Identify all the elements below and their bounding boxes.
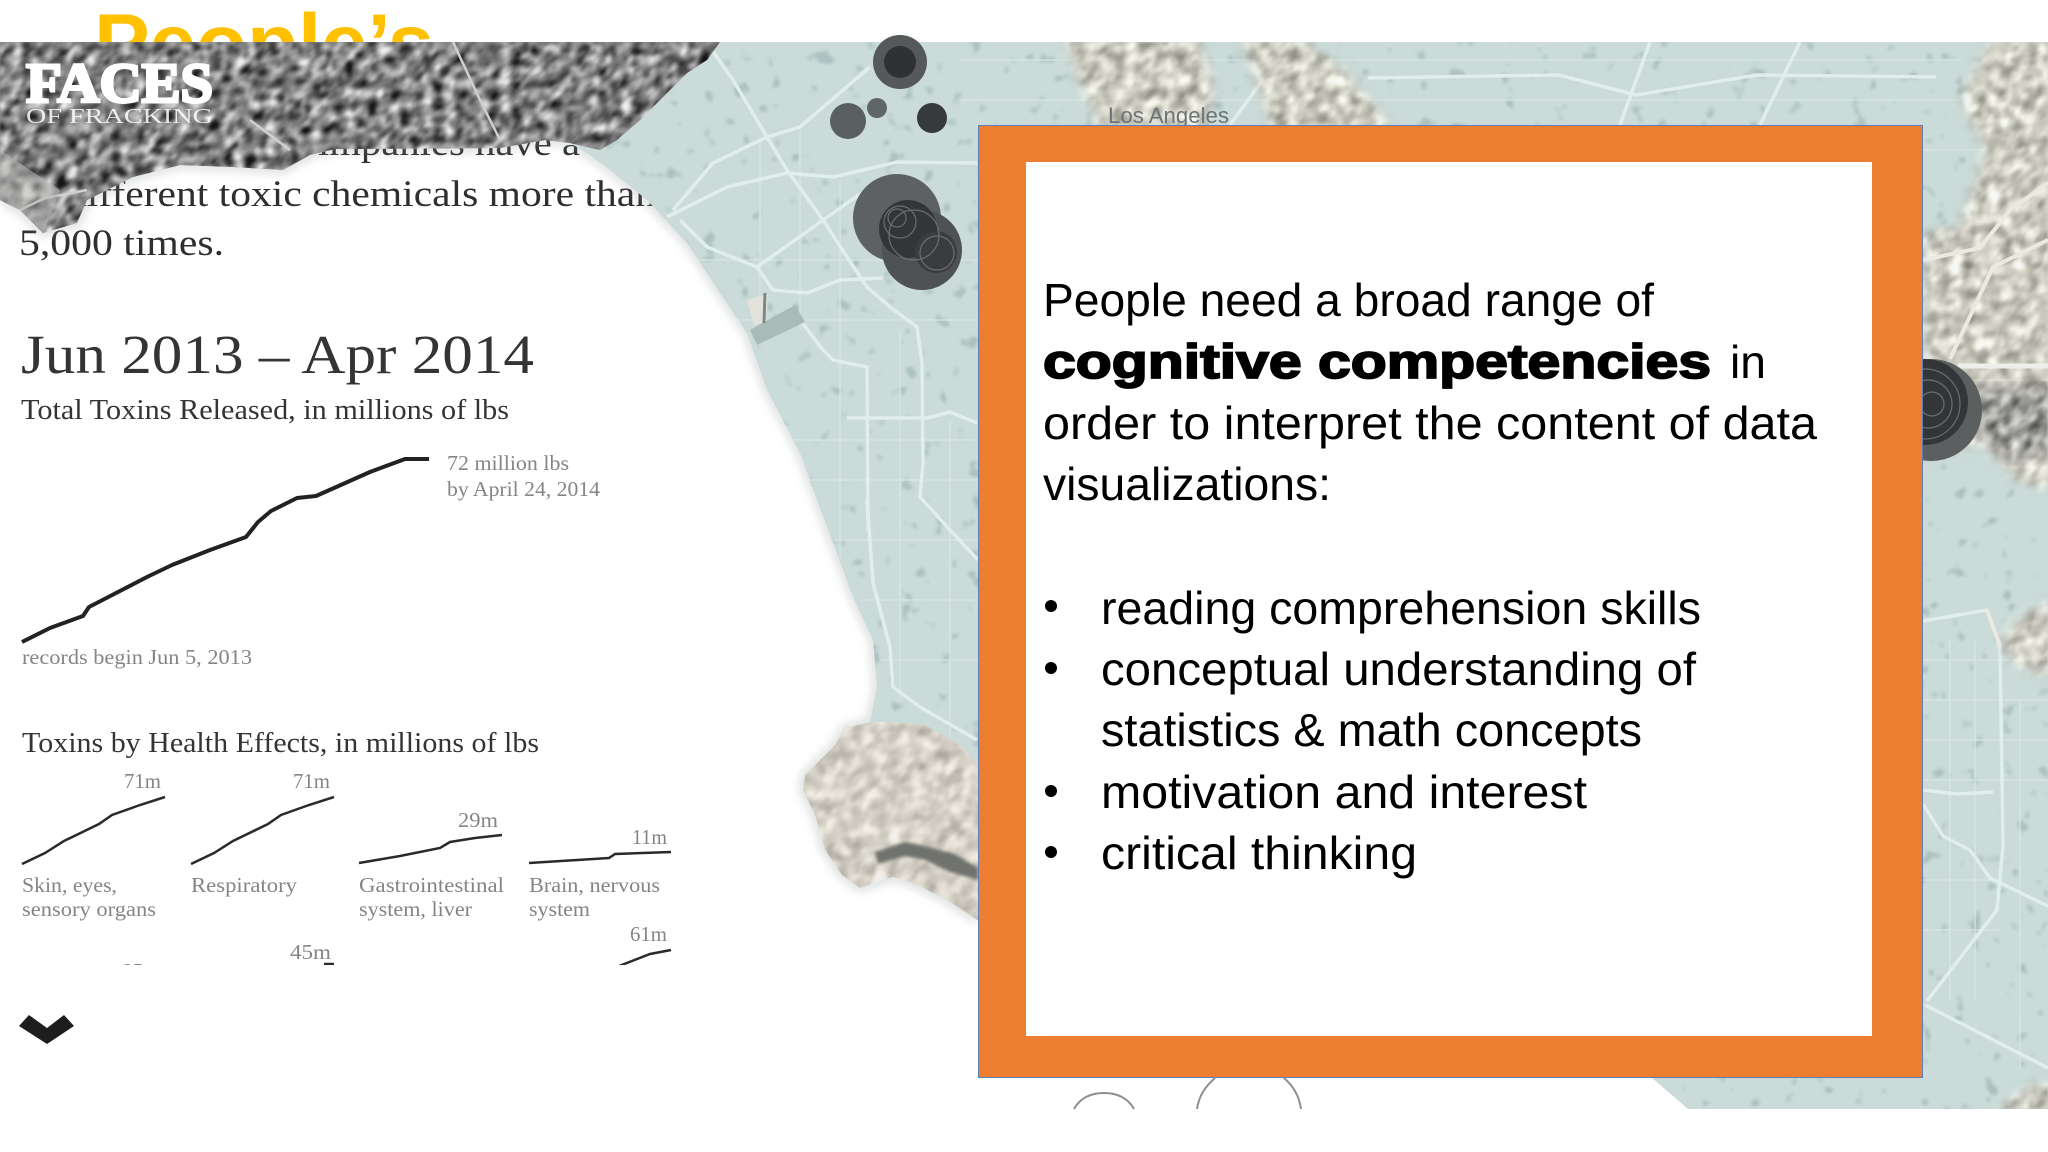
sand patch — [747, 294, 768, 325]
logo wordmark: FACES — [26, 53, 213, 115]
cropped circle outlines at bottom — [1074, 1078, 1301, 1109]
bubble — [917, 103, 947, 133]
clipped lower row of small charts: 85m — [122, 959, 160, 983]
hill base — [790, 710, 990, 930]
airport divider line — [764, 293, 765, 323]
total toxins chart — [21, 394, 601, 669]
northern mountains — [0, 42, 740, 242]
chart: respiratory: Respiratory — [191, 873, 298, 897]
intro sentence last line: 5,000 times. — [19, 223, 224, 264]
light terrain patches — [1000, 42, 2048, 1109]
toxin release bubbles — [830, 35, 1982, 461]
panel: cognitive competencies — [978, 126, 1922, 1078]
intro line 4: visualizations: — [1043, 458, 1331, 510]
clipped lower row of small charts: 45m — [290, 940, 331, 964]
mountain base — [0, 42, 740, 242]
chart: gastrointestinal system, liver: Gastrointestinal — [359, 873, 504, 897]
logo tagline: OF FRACKING — [26, 104, 213, 128]
map label: Los Angeles: Los Angeles — [1108, 103, 1229, 128]
chart: brain, nervous system: system — [529, 897, 590, 921]
mountain roads — [20, 42, 500, 210]
southern hills — [790, 710, 990, 930]
chart: brain, nervous system — [529, 825, 671, 921]
ridge road branches — [1923, 183, 2048, 646]
small circle outline — [1074, 1093, 1134, 1109]
intro line 2 ending: in — [1730, 336, 1766, 388]
chart: respiratory: 71m — [293, 769, 330, 793]
main roads — [667, 42, 2048, 1068]
light lower-left slope — [0, 150, 60, 233]
bubble cluster top core — [884, 46, 916, 78]
chart: respiratory — [191, 769, 334, 897]
chart: brain, nervous system: 11m — [632, 825, 667, 849]
bubble cluster top — [873, 35, 927, 89]
chart: skin, eyes, sensory organs: sensory organs — [22, 897, 156, 921]
bullet: statistical understanding: statistics & math concepts — [1101, 704, 1642, 756]
large circle outline — [1197, 1078, 1301, 1109]
bullet: critical thinking: critical thinking — [1101, 827, 1417, 879]
bullet: statistical understanding: conceptual understanding of — [1101, 643, 1696, 695]
chart: gastrointestinal system, liver — [359, 808, 504, 921]
hill texture — [790, 710, 990, 930]
hill shadow ridge — [875, 842, 978, 880]
end date label: by April 24, 2014 — [447, 477, 601, 501]
logo: Faces of Fracking — [26, 53, 213, 128]
white ridge road at right — [1958, 364, 2048, 368]
bullet list — [1045, 582, 1701, 879]
mountain texture — [0, 42, 740, 242]
end value label: 72 million lbs — [447, 451, 569, 475]
white card — [1026, 162, 1872, 1036]
runway block — [750, 305, 805, 345]
intro line 1: People need a broad range of — [1043, 274, 1654, 326]
chart: brain, nervous system: Brain, nervous — [529, 873, 660, 897]
airport patch — [747, 293, 805, 345]
date range heading: Jun 2013 – Apr 2014 — [21, 324, 534, 385]
health effects heading: Toxins by Health Effects, in millions of lbs — [22, 727, 539, 759]
icon: scroll-down chevron — [19, 1015, 74, 1044]
clipped lower row of small charts — [124, 927, 672, 965]
bullet: reading comprehension: reading comprehension skills — [1101, 582, 1701, 634]
chart: skin, eyes, sensory organs: 71m — [124, 769, 161, 793]
land speckle texture — [560, 42, 2048, 1109]
clipped lower row of small charts: 61m — [630, 922, 667, 946]
intro paragraph — [1043, 274, 1817, 510]
bubble cluster centre — [853, 174, 962, 290]
orange frame — [978, 126, 1922, 1078]
health effects small multiples — [22, 727, 671, 983]
bubble — [867, 98, 887, 118]
chart: skin, eyes, sensory organs — [22, 769, 165, 921]
start label: records begin Jun 5, 2013 — [22, 645, 252, 669]
bullet: statistical understanding — [1045, 643, 1696, 756]
chart: gastrointestinal system, liver: 29m — [458, 808, 498, 832]
intro line 3: order to interpret the content of data — [1043, 397, 1817, 449]
clipped yellow title: People’s — [94, 0, 434, 89]
intro sentence fragment: impanies have a — [318, 123, 580, 164]
darker ridge at right edge — [1960, 375, 2048, 475]
map shadow along the coast — [0, 140, 977, 920]
total toxins heading: Total Toxins Released, in millions of lbs — [21, 394, 509, 426]
bubble cluster right — [1880, 359, 1982, 461]
intro sentence second line: different toxic chemicals more than — [66, 174, 656, 215]
chart: gastrointestinal system, liver: system, liver — [359, 897, 472, 921]
bullet: motivation: motivation and interest — [1101, 766, 1587, 818]
street grid — [680, 60, 2048, 1070]
total toxins line — [22, 459, 429, 642]
bubble — [830, 103, 866, 139]
emphasised phrase: cognitive competencies — [1043, 336, 1711, 389]
article text on the page — [19, 123, 656, 264]
chart: skin, eyes, sensory organs: Skin, eyes, — [22, 873, 117, 897]
